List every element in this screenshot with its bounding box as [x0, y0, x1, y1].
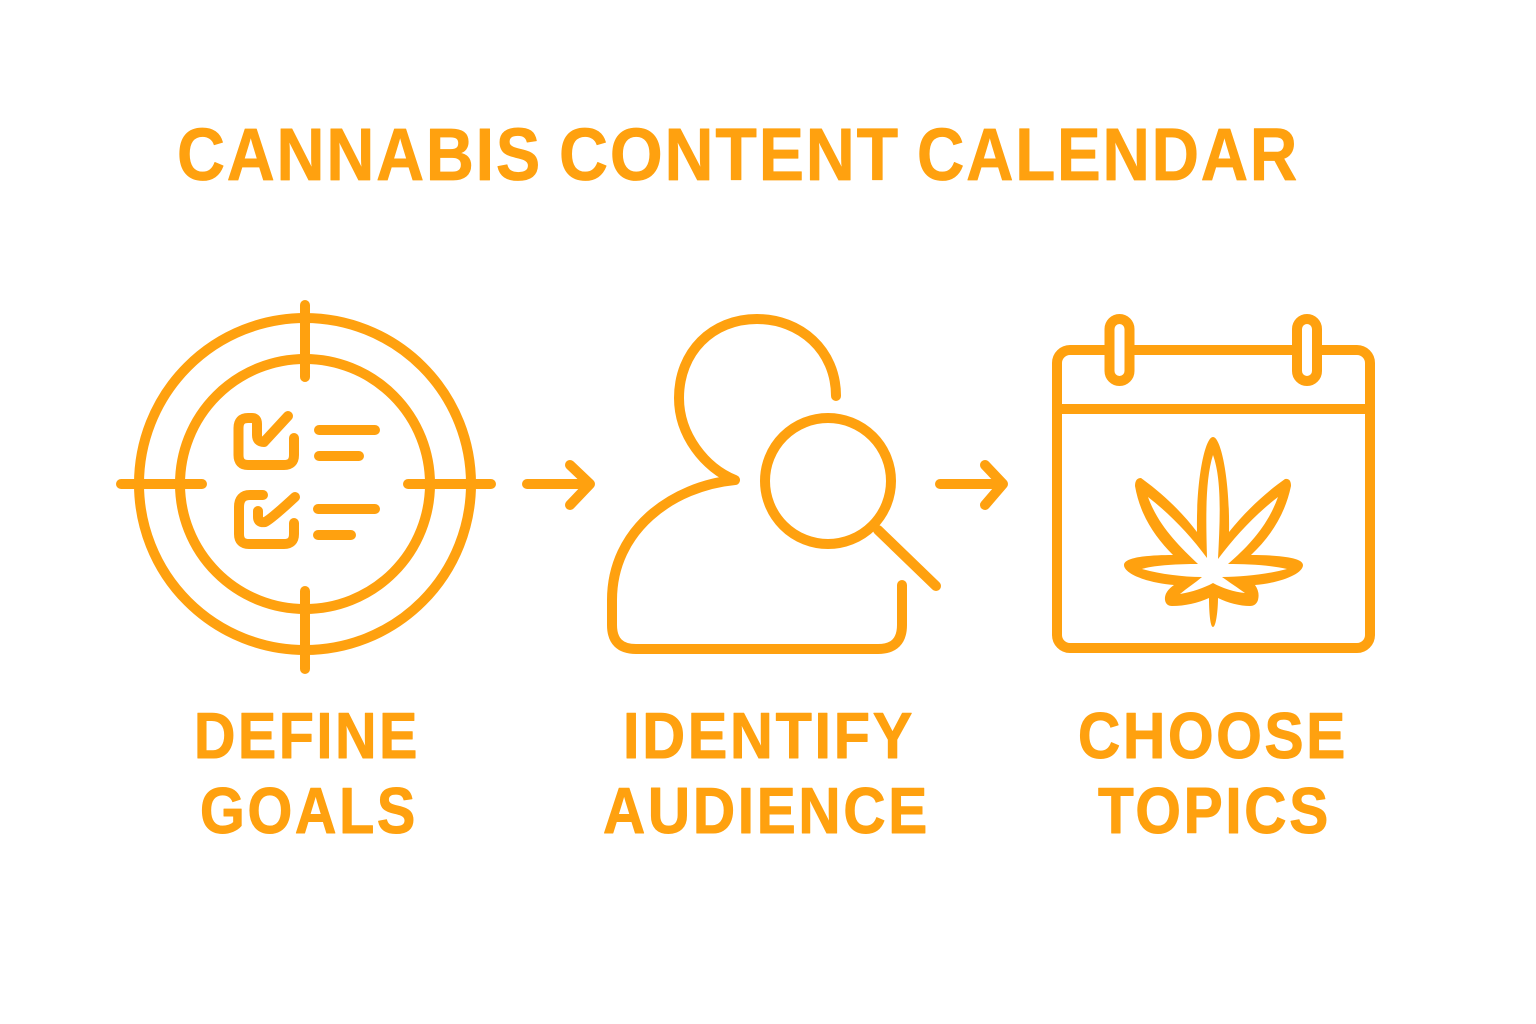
arrow: audience to topics: [940, 465, 1003, 505]
label: choose topics: [1078, 699, 1348, 847]
label: choose topics: TOPICS: [1098, 774, 1331, 847]
label: define goals: GOALS: [200, 774, 418, 847]
label: define goals: DEFINE: [194, 699, 420, 772]
label: define goals: [194, 699, 420, 847]
arrow: goals to audience: [527, 465, 590, 505]
title: [177, 113, 1299, 196]
label: choose topics: CHOOSE: [1078, 699, 1348, 772]
title: CALENDAR: [917, 113, 1299, 196]
cannabis leaf: [1124, 437, 1303, 627]
checklist item 1: [238, 416, 294, 465]
label: identify audience: IDENTIFY: [623, 699, 915, 772]
checklist item 2: [239, 495, 295, 544]
icon: person with magnifier: [612, 319, 936, 649]
checklist lines: [318, 430, 375, 535]
title: CANNABIS: [177, 113, 542, 196]
label: identify audience: AUDIENCE: [603, 774, 930, 847]
title: CONTENT: [559, 113, 900, 196]
icon: calendar with cannabis leaf: [1057, 319, 1370, 648]
label: identify audience: [603, 699, 930, 847]
icon: target with checklist: [121, 305, 491, 669]
